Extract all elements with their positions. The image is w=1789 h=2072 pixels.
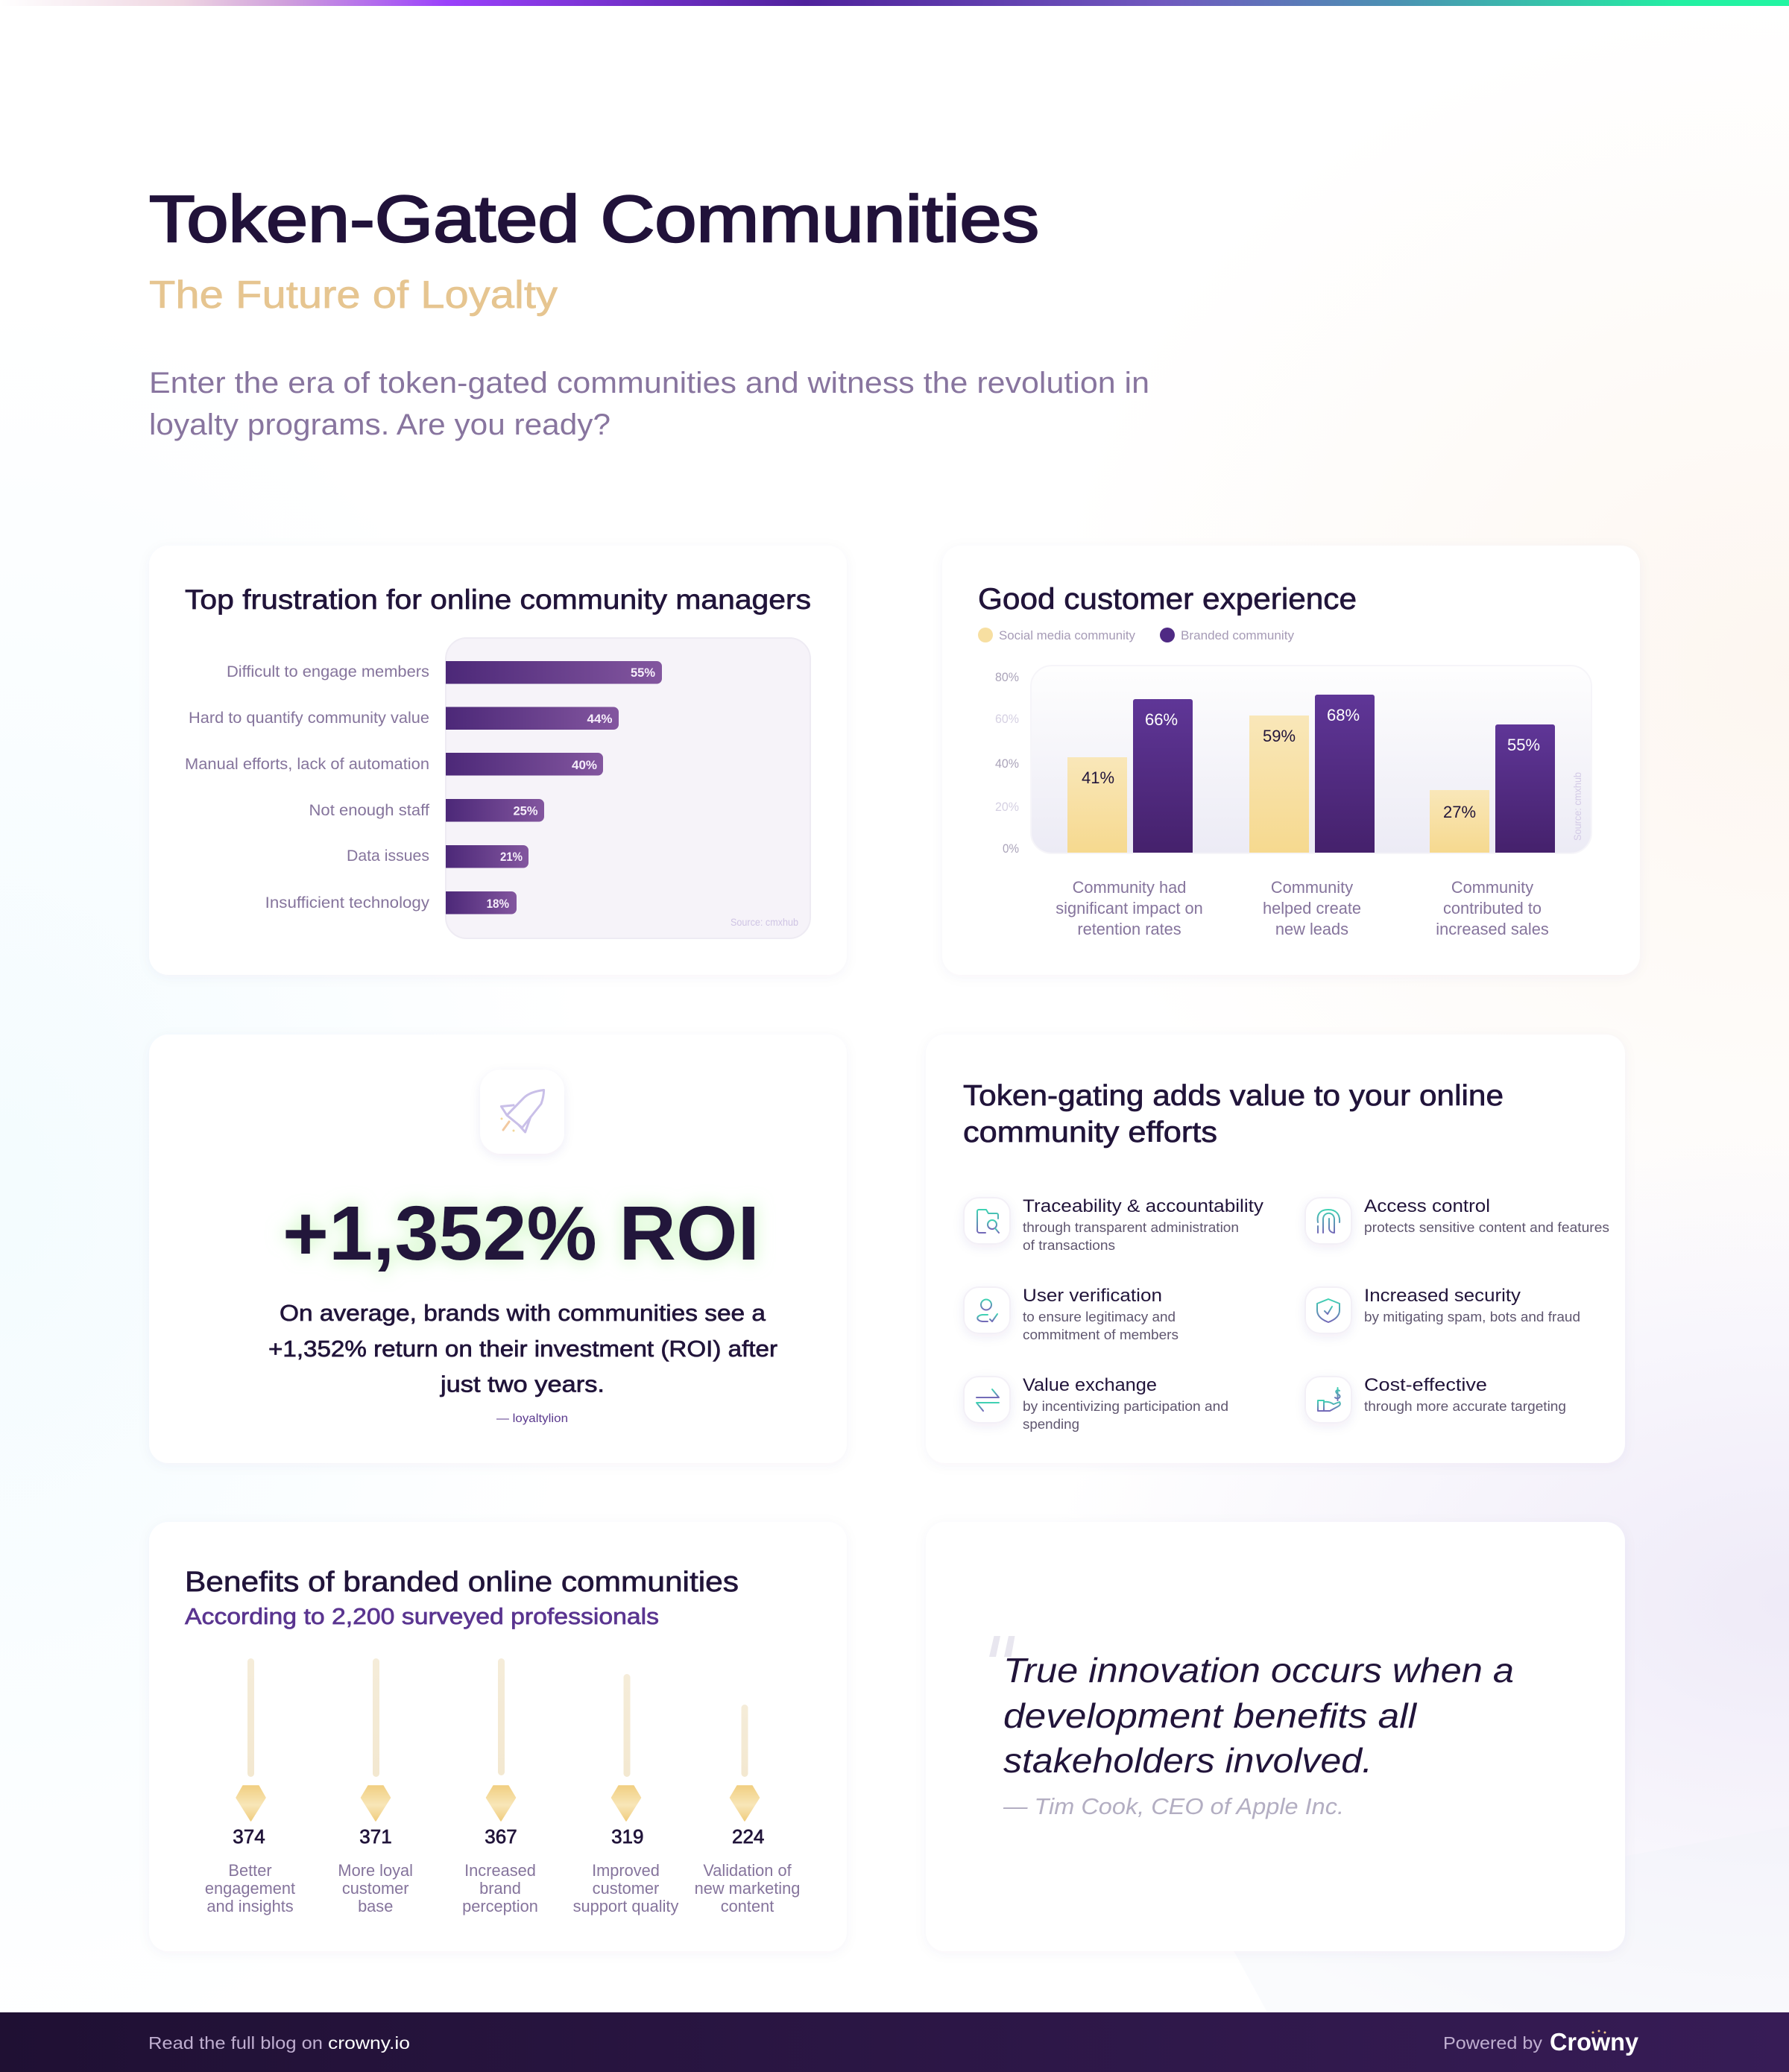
column chart: Source: cmxhub xyxy=(1571,772,1583,841)
heading: good customer experience: Good customer experience xyxy=(978,583,1357,616)
horizontal bar chart: 44% xyxy=(587,712,613,726)
icon: rocket xyxy=(480,1070,564,1154)
column chart: 20% xyxy=(995,800,1019,814)
item: cost-effective xyxy=(1305,1375,1566,1423)
benefit: brand perception: brand xyxy=(479,1879,521,1898)
panel: good customer experience xyxy=(942,546,1640,975)
heading: token-gating value: community efforts xyxy=(963,1116,1217,1149)
chart legend xyxy=(978,628,1294,642)
benefit: more loyal base: More loyal xyxy=(338,1861,413,1880)
column chart: Community xyxy=(1271,878,1353,897)
horizontal bar chart: Manual efforts, lack of automation xyxy=(185,756,429,773)
benefit: brand perception: perception xyxy=(462,1897,538,1915)
benefit: brand perception xyxy=(462,1658,538,1915)
panel: benefits xyxy=(149,1522,847,1951)
panel: token-gating value xyxy=(926,1035,1625,1463)
horizontal bar chart: Source: cmxhub xyxy=(731,916,798,928)
horizontal bar chart: 55% xyxy=(631,666,655,680)
subheading: surveyed professionals: According to 2,200 surveyed professionals xyxy=(185,1603,659,1629)
horizontal bar chart: Difficult to engage members xyxy=(227,663,429,680)
quote text: True innovation occurs when a xyxy=(1003,1651,1514,1690)
ROI description: On average, brands with communities see a xyxy=(280,1300,766,1326)
icon: quotation mark xyxy=(989,1636,1015,1657)
heading: benefits: Benefits of branded online communities xyxy=(185,1567,739,1598)
column chart: 59% xyxy=(1263,727,1296,745)
item: traceability: Traceability & accountability xyxy=(1023,1196,1263,1216)
benefit: better engagement: and insights xyxy=(206,1897,294,1915)
benefit: more loyal base xyxy=(338,1658,413,1915)
chart legend: Social media community xyxy=(999,628,1135,642)
panel: ROI xyxy=(149,1035,847,1463)
benefit: marketing validation xyxy=(695,1705,800,1915)
item: increased security: by mitigating spam, bots and fraud xyxy=(1364,1310,1580,1324)
item: access control xyxy=(1305,1196,1609,1244)
column chart: 60% xyxy=(995,712,1019,726)
item: access control: Access control xyxy=(1364,1196,1490,1216)
benefit: marketing validation: new marketing xyxy=(695,1879,800,1898)
panel: top frustration xyxy=(149,546,847,975)
column chart: 41% xyxy=(1082,768,1114,787)
heading: token-gating value: Token-gating adds value to your online xyxy=(963,1080,1504,1112)
benefit: better engagement: Better xyxy=(228,1861,272,1880)
item: value exchange: spending xyxy=(1023,1417,1079,1432)
benefit: better engagement: 374 xyxy=(233,1825,265,1848)
column chart: 0% xyxy=(1003,841,1019,856)
source: loyaltylion: — loyaltylion xyxy=(496,1412,568,1425)
benefit: support quality: Improved xyxy=(592,1861,660,1880)
footer link text: crowny.io xyxy=(328,2033,410,2053)
big number: ROI: +1,352% ROI xyxy=(283,1190,760,1276)
horizontal bar chart: Insufficient technology xyxy=(265,894,430,912)
item: user verification: to ensure legitimacy and xyxy=(1023,1310,1176,1324)
intro text: loyalty programs. Are you ready? xyxy=(149,408,610,441)
column chart: 68% xyxy=(1327,706,1360,724)
item: user verification xyxy=(964,1286,1179,1342)
horizontal bar chart: 21% xyxy=(500,850,523,864)
item: traceability xyxy=(964,1196,1263,1253)
heading: token-gating value xyxy=(963,1080,1504,1149)
quote attribution: — Tim Cook, CEO of Apple Inc. xyxy=(1003,1793,1344,1819)
quote text: development benefits all xyxy=(1003,1696,1418,1735)
ROI description: +1,352% return on their investment (ROI) after xyxy=(268,1336,777,1362)
item: value exchange: by incentivizing participation and xyxy=(1023,1399,1228,1414)
column chart: Community had xyxy=(1073,878,1186,897)
column chart: significant impact on xyxy=(1056,899,1203,917)
column chart: Community xyxy=(1451,878,1533,897)
item: user verification: commitment of members xyxy=(1023,1327,1179,1342)
column chart: increased sales xyxy=(1436,920,1549,938)
footer link text: Read the full blog on xyxy=(148,2033,323,2053)
subtitle: The Future of Loyalty xyxy=(149,274,558,317)
ROI description: just two years. xyxy=(440,1371,605,1397)
item: increased security xyxy=(1305,1286,1580,1333)
horizontal bar chart: Not enough staff xyxy=(309,802,429,819)
column chart: 80% xyxy=(995,670,1019,684)
benefit: support quality xyxy=(573,1674,678,1915)
benefit: more loyal base: 371 xyxy=(359,1825,392,1848)
ROI description xyxy=(268,1300,777,1397)
item: increased security: Increased security xyxy=(1364,1286,1521,1306)
horizontal bar chart: 25% xyxy=(513,803,538,818)
horizontal bar chart: Hard to quantify community value xyxy=(189,710,429,727)
horizontal bar chart: Data issues xyxy=(347,847,429,865)
item: cost-effective: Cost-effective xyxy=(1364,1375,1487,1395)
column chart xyxy=(995,666,1591,938)
top gradient bar xyxy=(0,0,1789,6)
item: traceability: through transparent administration xyxy=(1023,1220,1239,1235)
benefit: marketing validation: content xyxy=(721,1897,774,1915)
powered by Crowny: Powered by xyxy=(1443,2033,1543,2053)
panel: quote xyxy=(926,1522,1625,1951)
benefit: marketing validation: Validation of xyxy=(703,1861,792,1880)
benefit: marketing validation: 224 xyxy=(732,1825,764,1848)
item: user verification: User verification xyxy=(1023,1286,1162,1306)
powered by Crowny xyxy=(1443,2028,1639,2056)
footer xyxy=(0,2012,1789,2072)
column chart: 27% xyxy=(1443,803,1476,821)
quote text xyxy=(1003,1651,1514,1780)
horizontal bar chart: 18% xyxy=(487,897,509,911)
column chart: retention rates xyxy=(1077,920,1181,938)
chart legend: Branded community xyxy=(1181,628,1294,642)
title: Token-Gated Communities xyxy=(149,182,1039,256)
column chart: 55% xyxy=(1507,736,1540,754)
heading: top frustration: Top frustration for online community managers xyxy=(185,584,811,615)
intro text: Enter the era of token-gated communities and witness the revolution in xyxy=(149,367,1149,399)
benefit: support quality: 319 xyxy=(611,1825,643,1848)
benefit: better engagement: engagement xyxy=(205,1879,295,1898)
horizontal bar chart xyxy=(185,638,810,938)
column chart: helped create xyxy=(1263,899,1361,917)
quote text: stakeholders involved. xyxy=(1003,1741,1372,1780)
column chart: contributed to xyxy=(1443,899,1542,917)
column chart: 66% xyxy=(1145,710,1178,729)
header xyxy=(149,182,1149,441)
benefit: support quality: customer xyxy=(593,1879,659,1898)
column chart: 40% xyxy=(995,757,1019,771)
benefit: more loyal base: customer xyxy=(342,1879,409,1898)
intro text xyxy=(149,367,1149,441)
item: access control: protects sensitive content and features xyxy=(1364,1220,1609,1235)
item: value exchange xyxy=(964,1375,1228,1432)
benefit: brand perception: 367 xyxy=(485,1825,517,1848)
benefit: support quality: support quality xyxy=(573,1897,678,1915)
benefit: better engagement xyxy=(205,1658,295,1915)
powered by Crowny: Crowny xyxy=(1550,2028,1639,2056)
column chart: new leads xyxy=(1275,920,1348,938)
item: cost-effective: through more accurate targeting xyxy=(1364,1399,1566,1414)
footer link text xyxy=(148,2033,410,2053)
item: traceability: of transactions xyxy=(1023,1238,1115,1253)
item: value exchange: Value exchange xyxy=(1023,1375,1157,1395)
benefit: more loyal base: base xyxy=(358,1897,393,1915)
benefit: brand perception: Increased xyxy=(464,1861,536,1880)
horizontal bar chart: 40% xyxy=(572,758,597,772)
